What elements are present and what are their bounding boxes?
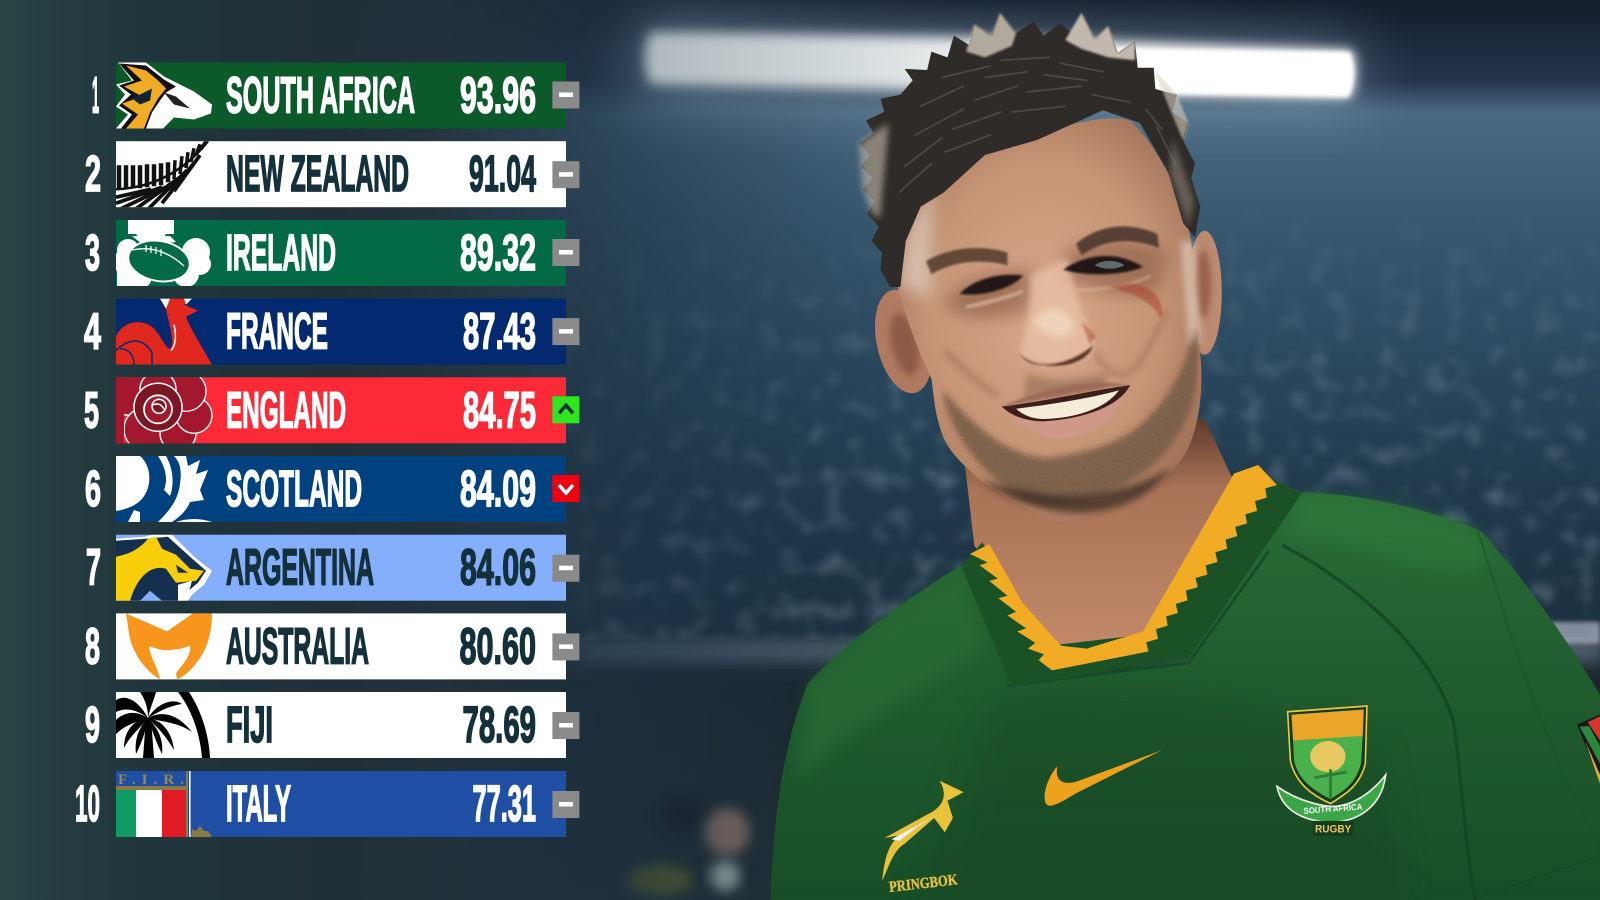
row 2: New Zealand: NEW ZEALAND — [226, 145, 409, 202]
row 9: Fiji — [85, 692, 579, 758]
stadium background — [464, 0, 1600, 900]
row 7: Argentina: ARGENTINA — [226, 539, 374, 596]
movement badge: unchanged — [552, 712, 579, 739]
score: 84.09 — [460, 460, 536, 517]
row 6: Scotland: SCOTLAND — [226, 460, 362, 517]
row 10: Italy — [75, 771, 579, 837]
rank number: 5 — [84, 381, 99, 438]
South Africa rugby crest: SOUTH AFRICA — [1303, 801, 1363, 816]
rank number: 6 — [85, 460, 101, 517]
score: 89.32 — [460, 224, 536, 281]
movement badge: unchanged — [552, 161, 579, 188]
face — [889, 118, 1201, 521]
movement badge: up — [552, 396, 579, 423]
movement badge: unchanged — [552, 555, 579, 582]
row 3: Ireland — [85, 220, 580, 286]
left panel shading — [0, 0, 900, 900]
logo: silver fern — [116, 141, 208, 210]
rank number: 8 — [85, 617, 100, 674]
movement badge: unchanged — [552, 791, 579, 818]
row 10: Italy: 77.31 — [472, 775, 536, 832]
row 1: South Africa: SOUTH AFRICA — [226, 66, 415, 124]
row 1: South Africa: 1 — [92, 66, 99, 124]
logo: wallaby — [126, 613, 212, 679]
rank number: 7 — [86, 539, 101, 596]
smile — [1002, 383, 1130, 439]
logo: red rose — [116, 377, 213, 444]
score: 93.96 — [460, 66, 536, 124]
logo: thistle — [116, 456, 212, 522]
logo: shamrock with ball — [116, 220, 211, 286]
row 8: Australia — [85, 613, 579, 679]
row 7: Argentina — [86, 535, 579, 601]
row 10: Italy: 10 — [75, 775, 100, 832]
stadium floodlight — [640, 22, 1358, 110]
rankings table — [75, 62, 579, 837]
movement badge: unchanged — [552, 318, 579, 345]
South Africa rugby crest: RUGBY — [1315, 823, 1351, 835]
rank number: 4 — [84, 303, 101, 360]
logo: springbok — [116, 62, 212, 128]
score: 78.69 — [462, 696, 536, 753]
nose — [1018, 309, 1096, 366]
logo: jaguar — [116, 535, 212, 601]
row 3: Ireland: IRELAND — [226, 224, 336, 281]
movement badge: down — [552, 475, 579, 502]
eyebrows and eyes — [926, 226, 1159, 307]
score: 84.06 — [460, 539, 536, 596]
score: 91.04 — [469, 145, 536, 202]
rank number: 2 — [85, 145, 101, 202]
row 5: England: ENGLAND — [226, 381, 346, 438]
movement badge: unchanged — [552, 239, 579, 266]
jersey — [771, 492, 1600, 900]
Nike swoosh — [1045, 750, 1162, 806]
row 4: France — [84, 299, 579, 365]
logo: F.I.R. shield: F.I.R. — [118, 772, 184, 788]
ears — [866, 231, 1222, 400]
row 1: South Africa — [92, 62, 579, 128]
springbok emblem: PRINGBOK — [888, 872, 959, 896]
springbok emblem — [882, 781, 964, 896]
player photo illustration — [771, 13, 1600, 900]
team name: FIJI — [226, 696, 273, 753]
score: 84.75 — [463, 381, 536, 438]
South Africa rugby crest — [1277, 706, 1386, 836]
row 2: New Zealand — [85, 141, 579, 210]
row 5: England — [84, 377, 580, 444]
score: 80.60 — [460, 617, 536, 674]
cut on cheek — [1108, 284, 1162, 319]
row 4: France: FRANCE — [226, 303, 328, 360]
logo: F.I.R. shield — [116, 771, 212, 837]
row 8: Australia: AUSTRALIA — [226, 617, 369, 674]
logo: palm tree — [116, 692, 210, 758]
hair — [859, 13, 1200, 287]
movement badge: unchanged — [552, 633, 579, 660]
neck — [964, 419, 1258, 666]
rank number: 3 — [85, 224, 100, 281]
South African flag sleeve patch — [1577, 715, 1600, 784]
collar — [961, 465, 1302, 686]
score: 87.43 — [463, 303, 536, 360]
logo: rooster — [116, 299, 212, 365]
row 6: Scotland — [85, 456, 579, 522]
row 10: Italy: ITALY — [226, 775, 291, 832]
rank number: 9 — [85, 696, 100, 753]
movement badge: unchanged — [552, 82, 579, 108]
